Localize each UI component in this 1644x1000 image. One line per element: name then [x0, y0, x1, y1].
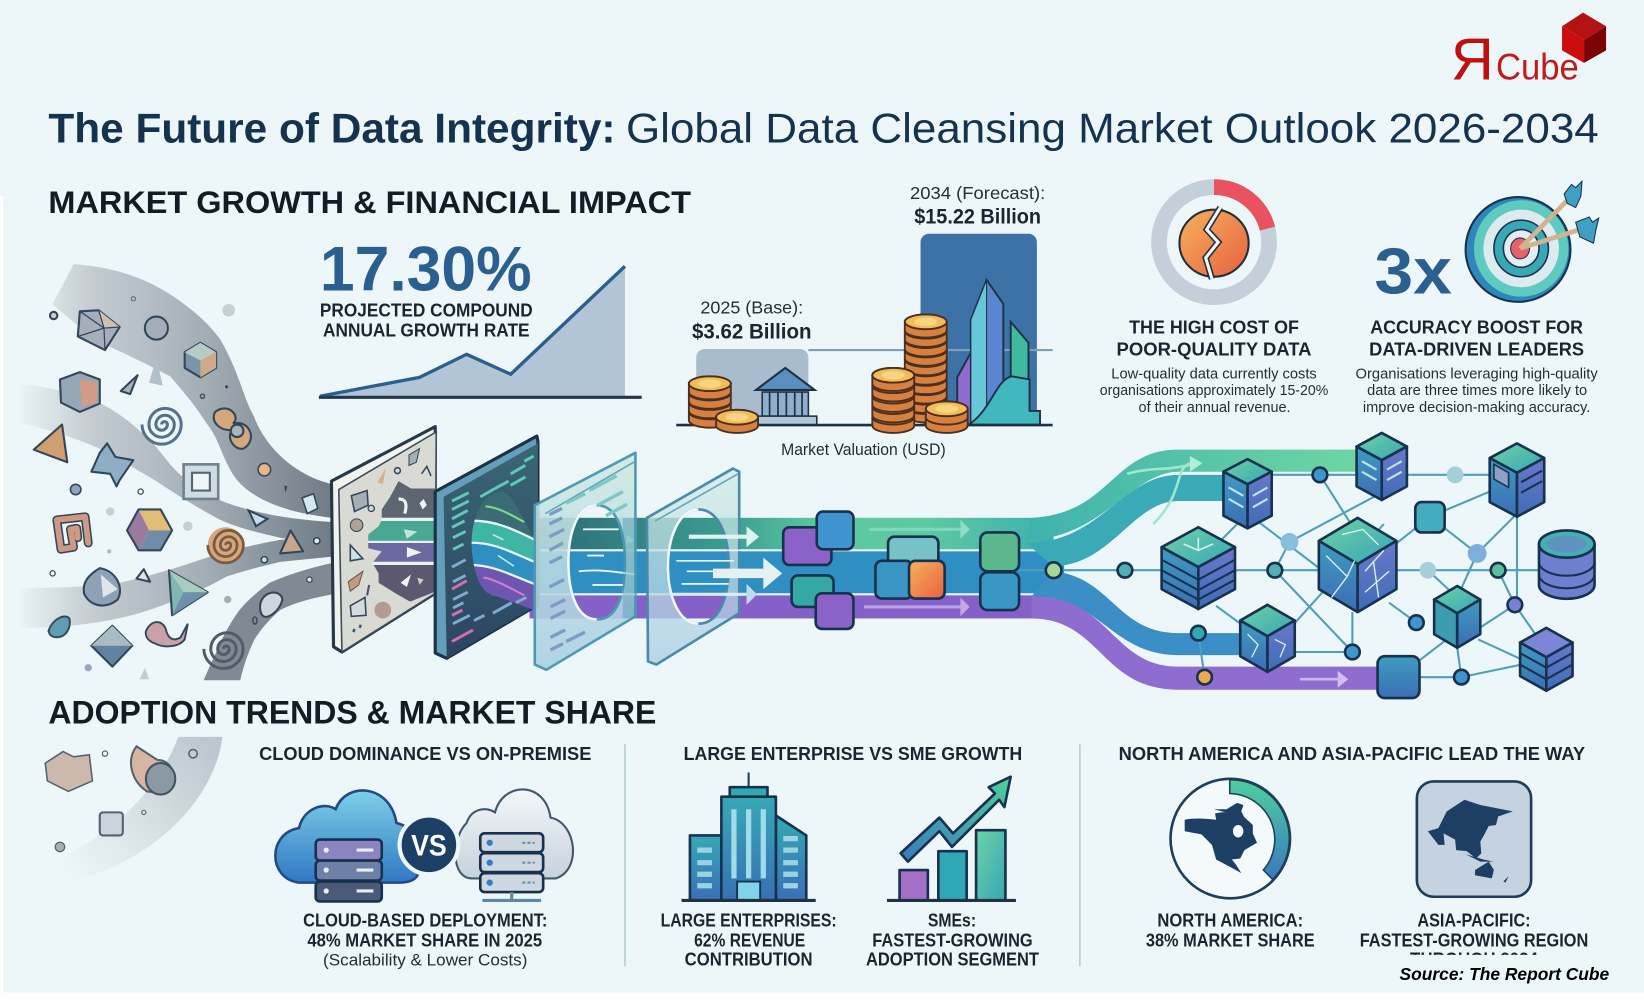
- caption: 48% MARKET SHARE IN 2025: [307, 930, 542, 951]
- filter panel 1: raw data: [331, 427, 437, 652]
- caption: Asia-Pacific: FASTEST-GROWING REGION: [1360, 930, 1588, 951]
- network links: [1019, 475, 1573, 677]
- network nodes: [1046, 433, 1595, 698]
- dividers: [625, 744, 1080, 966]
- caption: North America: 38% MARKET SHARE: [1146, 930, 1315, 951]
- icon: North America globe: [1171, 779, 1290, 898]
- text: high cost: POOR-QUALITY DATA: [1117, 338, 1312, 359]
- area chart: growth: [319, 266, 642, 397]
- source note: Source: The Report Cube: [1400, 964, 1609, 984]
- text: high cost: of their annual revenue.: [1139, 400, 1291, 416]
- text: accuracy boost: ACCURACY BOOST FOR: [1370, 316, 1583, 337]
- stat: CAGR: PROJECTED COMPOUND: [320, 300, 533, 321]
- caption: large enterprises: 62% REVENUE: [694, 930, 805, 951]
- bar: 2034: [921, 234, 1037, 426]
- badge: VS: [400, 816, 458, 874]
- flow: raw data streams: [20, 264, 332, 680]
- flow: teal branch: [1026, 475, 1232, 566]
- logo: RCube: [1451, 13, 1606, 93]
- caption: North America: [1146, 910, 1315, 951]
- caption: [303, 910, 547, 969]
- filter panel 4: translucent: [647, 469, 744, 665]
- icon: city and coins: [872, 280, 1040, 433]
- stat: 3x: 3x: [1374, 235, 1452, 308]
- caption: SMEs: ADOPTION SEGMENT: [866, 948, 1039, 969]
- text: accuracy boost: DATA-DRIVEN LEADERS: [1369, 338, 1584, 359]
- panel: regions: [1119, 743, 1588, 969]
- scattered data fragments: [34, 297, 320, 679]
- caption: large enterprises: [661, 910, 837, 969]
- caption: Asia-Pacific: [1360, 914, 1588, 955]
- flow: central ribbon: [530, 518, 1064, 618]
- label: 2034: [910, 183, 1045, 228]
- icon: on-premise servers: [455, 789, 573, 900]
- icon: cloud servers: [275, 790, 421, 901]
- panel: large enterprise vs SME: [661, 743, 1039, 969]
- label: 2025: [692, 297, 812, 344]
- badge: VS: VS: [411, 829, 447, 862]
- icon: office building: [682, 773, 816, 900]
- caption: Asia-Pacific: THROUGH 2034: [1410, 948, 1538, 969]
- title: [48, 105, 1599, 152]
- title: The Future of Data Integrity:: [48, 105, 616, 152]
- caption: CLOUD-BASED DEPLOYMENT:: [303, 910, 547, 931]
- stat: CAGR: ANNUAL GROWTH RATE: [323, 319, 530, 340]
- bar: 2025: [696, 349, 808, 426]
- text: accuracy boost: [1356, 316, 1598, 416]
- label: 2025: $3.62 Billion: [692, 321, 812, 344]
- sub-heading: NORTH AMERICA AND ASIA-PACIFIC LEAD THE WAY: [1119, 743, 1586, 764]
- arrows on ribbon: [671, 456, 1348, 688]
- caption: Asia-Pacific: ASIA-PACIFIC:: [1417, 910, 1531, 931]
- stat: CAGR: 17.30%: [320, 234, 532, 304]
- heading: market growth: MARKET GROWTH & FINANCIAL IMPACT: [48, 185, 691, 220]
- label: 2025: 2025 (Base):: [700, 297, 803, 317]
- flow: blue branch: [1032, 571, 1248, 655]
- axis caption: Market Valuation (USD): [781, 441, 946, 459]
- caption: SMEs: SMEs:: [928, 910, 976, 931]
- heading: adoption trends: ADOPTION TRENDS & MARKET SHARE: [48, 694, 656, 730]
- icon: target with arrows: [1466, 181, 1599, 302]
- caption: SMEs: [866, 910, 1039, 969]
- title: Global Data Cleansing Market Outlook 2026-2034: [626, 105, 1599, 152]
- caption: large enterprises: LARGE ENTERPRISES:: [661, 910, 837, 931]
- caption: North America: NORTH AMERICA:: [1157, 910, 1303, 931]
- filter panel 3: translucent: [535, 453, 635, 670]
- text: accuracy boost: Organisations leveraging high-quality: [1356, 366, 1598, 382]
- icon: donut with broken circle: [1159, 187, 1269, 297]
- lower data stream with fragments: [26, 737, 222, 883]
- text: high cost: Low-quality data currently costs: [1111, 366, 1317, 382]
- caption: large enterprises: CONTRIBUTION: [685, 948, 813, 969]
- logo: RCube: Cube: [1496, 47, 1579, 88]
- icon: SME growth chart: [887, 777, 1016, 900]
- stat: CAGR: [320, 234, 533, 340]
- text: accuracy boost: improve decision-making accuracy.: [1363, 400, 1590, 416]
- processing blocks: [783, 512, 1019, 629]
- bar chart: market valuation: [676, 183, 1053, 459]
- label: 2034: $15.22 Billion: [914, 205, 1041, 228]
- caption: (Scalability & Lower Costs): [323, 950, 527, 969]
- flow: green branch: [1026, 450, 1363, 540]
- text: high cost: THE HIGH COST OF: [1129, 316, 1299, 337]
- panel: cloud vs on-premise: [259, 743, 591, 969]
- logo: RCube: Я: [1451, 26, 1494, 93]
- text: high cost: organisations approximately 15-20%: [1100, 383, 1328, 399]
- filter panel 2: code scan: [435, 436, 540, 658]
- icon: Asia-Pacific map: [1417, 781, 1531, 897]
- caption: SMEs: FASTEST-GROWING: [872, 930, 1033, 951]
- sub-heading: CLOUD DOMINANCE VS ON-PREMISE: [259, 743, 591, 764]
- text: accuracy boost: data are three times more likely to: [1367, 383, 1587, 399]
- sub-heading: LARGE ENTERPRISE VS SME GROWTH: [684, 743, 1022, 764]
- text: high cost: [1100, 316, 1328, 416]
- label: 2034: 2034 (Forecast):: [910, 183, 1045, 203]
- flow: purple branch: [1032, 596, 1384, 690]
- icon: coins and bank: [689, 368, 817, 433]
